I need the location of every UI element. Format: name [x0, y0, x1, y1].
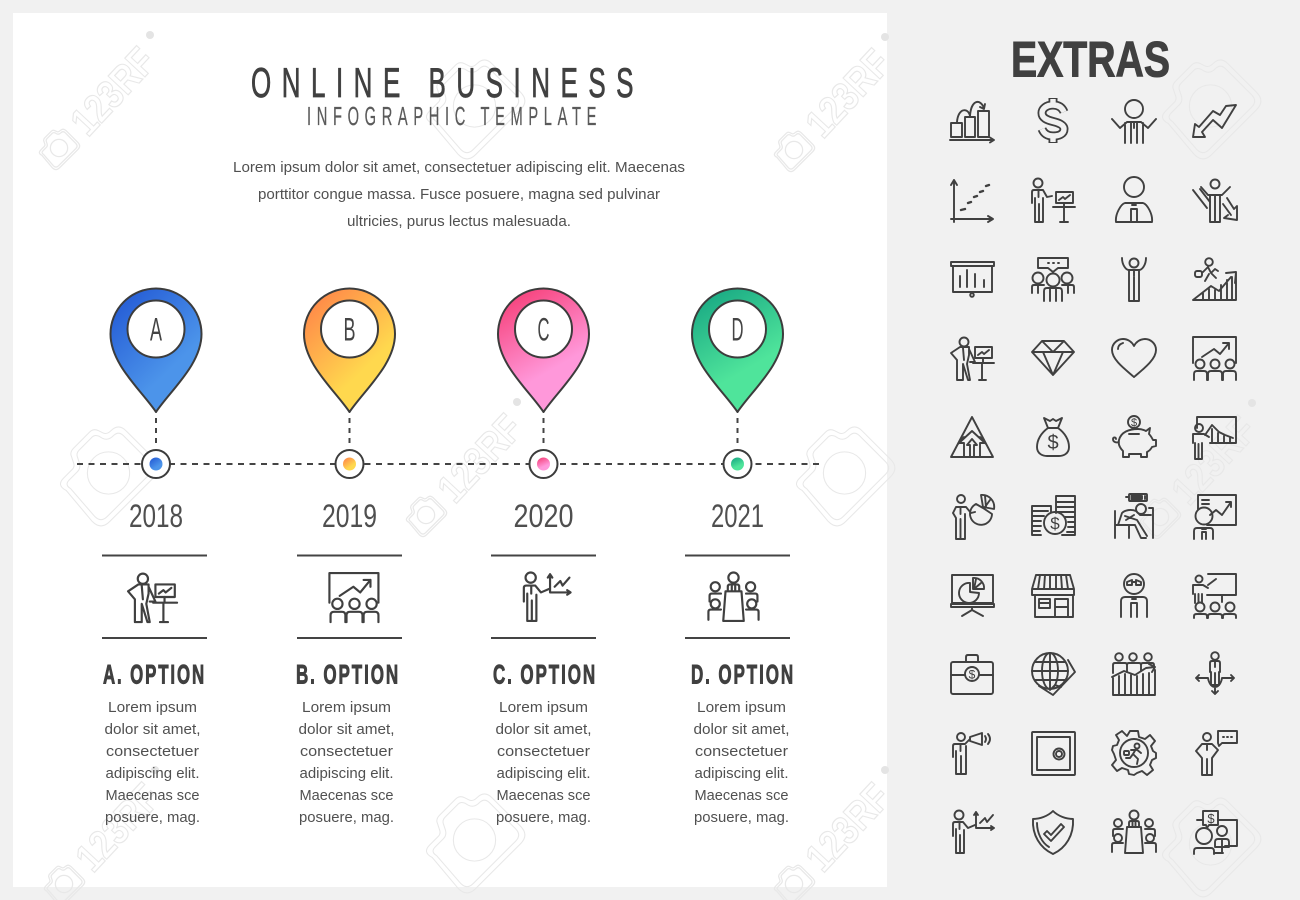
heading A: A. OPTION [103, 660, 206, 690]
pin A [110, 288, 202, 412]
text block A: Lorem ipsum [108, 699, 197, 716]
intro paragraph: porttitor congue massa. Fusce posuere, magna sed pulvinar [258, 186, 660, 203]
text block C: adipiscing elit. [496, 765, 590, 782]
heading B: B. OPTION [296, 660, 400, 690]
text block C: posuere, mag. [496, 809, 591, 826]
icon: bust with chart board [1194, 495, 1236, 539]
pin C [498, 288, 589, 412]
year 2018: 2018 [129, 498, 183, 534]
icon: coin stacks: $ [1050, 514, 1060, 533]
icon: diamond [1032, 341, 1074, 375]
timeline [77, 418, 822, 464]
heading C: C. OPTION [493, 660, 597, 690]
icon: bust [1116, 177, 1152, 222]
text block D [694, 699, 790, 826]
text block D: Lorem ipsum [697, 699, 786, 716]
icon: person with pie [953, 495, 994, 539]
heading D: D. OPTION [691, 660, 795, 690]
text block B: adipiscing elit. [300, 765, 394, 782]
text block C: dolor sit amet, [496, 721, 592, 738]
extras heading: EXTRAS [1011, 32, 1170, 88]
watermarks: 123RF [67, 776, 169, 880]
text block B: posuere, mag. [299, 809, 394, 826]
text block B: Lorem ipsum [302, 699, 391, 716]
text block C: Lorem ipsum [499, 699, 588, 716]
icon: runner on chart [1193, 258, 1236, 300]
text block C: consectetuer [497, 743, 590, 760]
text block A [104, 699, 200, 826]
icon: scatter axes [951, 180, 993, 222]
icon: rising bars [950, 102, 994, 142]
icon: person on crossroads [1196, 652, 1234, 694]
timeline marker D [724, 450, 752, 478]
timeline marker B [336, 450, 364, 478]
text block A: dolor sit amet, [104, 721, 200, 738]
icon: money bag: $ [1047, 432, 1059, 454]
icon: globe in hand [1032, 653, 1075, 695]
icon: presentation board [951, 262, 994, 297]
icon: presenter at monitor small [951, 338, 994, 380]
text block A: consectetuer [106, 743, 199, 760]
intro paragraph [233, 159, 685, 230]
text block B: consectetuer [300, 743, 393, 760]
text block B [298, 699, 394, 826]
icon: person with megaphone [953, 733, 990, 774]
icon: person at monitor [1032, 178, 1075, 222]
icon: money bag [1037, 418, 1069, 456]
pin A: A [150, 312, 162, 348]
icon: dollar sign [1042, 98, 1064, 143]
icon: tired worker with battery [1115, 494, 1153, 538]
icon: person with glasses [1121, 574, 1147, 617]
text block B: Maecenas sce [300, 787, 394, 804]
text block A: posuere, mag. [105, 809, 200, 826]
text block D: Maecenas sce [694, 787, 788, 804]
icon: meeting small [1112, 810, 1156, 853]
text block C: Maecenas sce [496, 787, 590, 804]
icon: presenter with chart small [953, 810, 994, 853]
icon: meeting table [708, 572, 759, 621]
intro paragraph: ultricies, purus lectus malesuada. [347, 213, 571, 230]
icon: shield check [1033, 811, 1073, 854]
text block A: Maecenas sce [106, 787, 200, 804]
icon: presenter with chart [524, 572, 571, 621]
icon: group with speech bubble [1032, 258, 1074, 301]
timeline marker C [530, 450, 558, 478]
text block D: dolor sit amet, [694, 721, 790, 738]
text block D: adipiscing elit. [694, 765, 788, 782]
pin D [692, 288, 783, 412]
watermarks: 123RF [429, 407, 531, 511]
icon: falling arrow [1193, 105, 1236, 137]
pin C: C [538, 312, 550, 348]
icon: piggy bank: $ [1131, 417, 1137, 429]
pin B [304, 288, 395, 412]
icon: projector pie [951, 575, 994, 616]
watermarks: 123RF [62, 40, 164, 144]
icon: piggy bank [1113, 416, 1156, 457]
panel: main white card [13, 13, 887, 887]
icon: store [1032, 575, 1074, 617]
icon: board with audience [329, 573, 378, 622]
icon: person arms out [1112, 100, 1156, 143]
icon: triangle with arrow [951, 417, 993, 457]
text block B: dolor sit amet, [298, 721, 394, 738]
icon: people with monitor and dollar [1194, 811, 1237, 854]
icon: presenter declining chart [1193, 417, 1236, 459]
year 2019: 2019 [322, 498, 377, 534]
text block D: consectetuer [695, 743, 788, 760]
icon: person falling arrows [1193, 180, 1237, 222]
watermarks: 123RF [797, 776, 899, 880]
subtitle: INFOGRAPHIC TEMPLATE [307, 101, 602, 131]
text block A: adipiscing elit. [106, 765, 200, 782]
watermarks: 123RF [797, 42, 899, 146]
year 2020: 2020 [514, 498, 574, 534]
icon: teacher with audience [1193, 574, 1236, 618]
text block D: posuere, mag. [694, 809, 789, 826]
icon: coin stacks [1032, 496, 1075, 535]
timeline marker A [142, 450, 170, 478]
icon: people with monitor and dollar: $ [1207, 811, 1215, 826]
pin B: B [344, 312, 356, 348]
title: ONLINE BUSINESS [251, 59, 644, 106]
watermarks: 123RF [1163, 409, 1265, 513]
icon: safe [1032, 732, 1075, 775]
icon: heart [1112, 339, 1156, 377]
divider lines [102, 556, 790, 638]
icon: person arms raised [1122, 258, 1146, 301]
icon: person with speech bubble [1196, 731, 1237, 775]
icon: briefcase: $ [969, 668, 976, 682]
intro paragraph: Lorem ipsum dolor sit amet, consectetuer adipiscing elit. Maecenas [233, 159, 685, 176]
text block C [496, 699, 592, 826]
panel: extras icon grid [950, 98, 1237, 854]
icon: gear with runner [1112, 731, 1156, 775]
icon: board audience small [1193, 337, 1236, 380]
year 2021: 2021 [711, 498, 764, 534]
icon: team over chart [1112, 653, 1155, 695]
icon: briefcase [951, 655, 993, 694]
pin D: D [732, 312, 744, 348]
icon: presenter at monitor [128, 574, 177, 622]
